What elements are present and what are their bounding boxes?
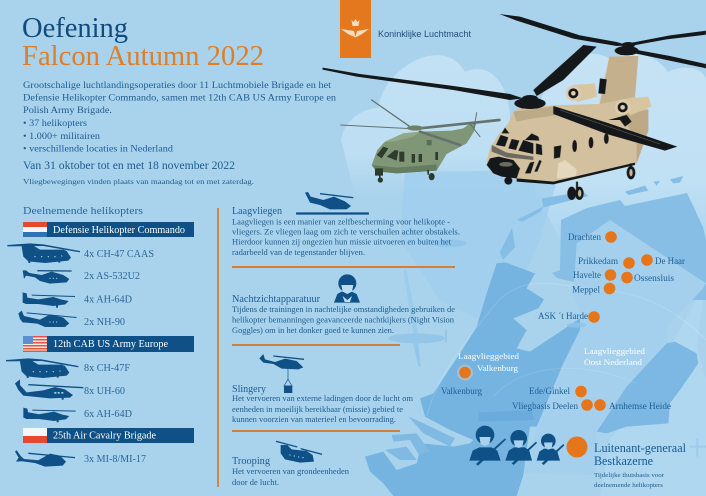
banner: 12th CAB US Army Europe	[23, 336, 194, 352]
icons: Defensie fleet	[7, 243, 80, 327]
icon: helicopter low flight	[296, 192, 369, 215]
faint overlays	[427, 283, 706, 417]
banner: 25th Air Cavalry Brigade: 25th Air Cavalry Brigade	[53, 430, 156, 442]
label: Laagvlieggebied Valkenburg	[458, 351, 520, 373]
section: Trooping: Het vervoeren van grondeenheden	[232, 467, 350, 476]
panel: participating helicopters: 8x UH-60	[84, 386, 125, 397]
icon: Chinook troop transport	[276, 441, 322, 463]
icon: MI-8	[15, 450, 75, 467]
label: Laagvlieggebied Oost Nederland	[584, 346, 646, 367]
heading: Deelnemende helikopters	[23, 206, 143, 217]
banner: 25th Air Cavalry Brigade	[23, 428, 194, 443]
engines	[566, 78, 652, 127]
islands of Zeeland	[408, 417, 455, 447]
map locations	[441, 231, 686, 489]
callout: Luitenant-generaal Bestkazerne: Bestkazerne	[594, 454, 653, 468]
intro text: Defensie Helikopter Commando, samen met 12th CAB US Army Europe en	[23, 92, 336, 104]
map of the Netherlands	[365, 170, 706, 496]
logo block	[340, 0, 371, 58]
label: Laagvlieggebied Valkenburg: Laagvlieggebied	[458, 351, 520, 361]
section: Slingery	[232, 354, 414, 424]
northern provinces	[552, 193, 706, 300]
section: Nachtzichtapparatuur	[232, 274, 455, 335]
intro text: Grootschalige luchtlandingsoperaties door 11 Luchtmobiele Brigade en het	[23, 80, 331, 91]
section: Slingery: Slingery	[232, 384, 267, 395]
location labels: Drachten	[568, 232, 601, 242]
column rule	[217, 208, 219, 487]
title	[22, 12, 264, 72]
fuselage	[487, 56, 648, 183]
date: Van 31 oktober tot en met 18 november 2022	[23, 160, 235, 172]
location labels: Meppel	[572, 284, 601, 294]
intro text: • 1.000+ militairen	[23, 131, 100, 142]
panel: participating helicopters: 6x AH-64D	[84, 409, 132, 420]
banner: Defensie Helikopter Commando	[23, 222, 194, 237]
location labels	[441, 232, 685, 411]
section: Nachtzichtapparatuur: Tijdens de trainingen in nachtelijke omstandigheden gebruiken de	[232, 305, 455, 314]
front rotor	[323, 45, 677, 151]
logo wordmark: Koninklijke Luchtmacht	[378, 29, 471, 40]
title: Falcon Autumn 2022	[22, 40, 264, 72]
label: Laagvlieggebied Oost Nederland: Oost Nederland	[584, 357, 643, 367]
callout: Luitenant-generaal Bestkazerne: Luitenant-generaal	[594, 441, 686, 455]
section: Slingery: eenheden in moeilijk bereikbaar (missie) gebied te	[232, 405, 403, 414]
section: Trooping: Trooping	[232, 456, 271, 467]
northern islands	[517, 176, 683, 222]
clouds	[341, 54, 706, 240]
belly line	[517, 163, 635, 184]
location labels: De Haar	[655, 256, 685, 266]
row labels: US fleet: 8x CH-47F	[84, 363, 130, 374]
banner: 12th CAB US Army Europe: 12th CAB US Army Europe	[53, 339, 168, 350]
section: Nachtzichtapparatuur: Nachtzichtapparatuur	[232, 294, 320, 305]
banner: Defensie Helikopter Commando: Defensie Helikopter Commando	[53, 225, 185, 236]
intro text: Polish Army Brigade.	[23, 105, 112, 116]
landing gear	[504, 163, 635, 200]
section: Trooping: door de lucht.	[232, 478, 279, 487]
logo emblem	[341, 19, 369, 38]
nose band	[492, 145, 533, 160]
section: Trooping	[232, 441, 350, 487]
location labels: Prikkedam	[578, 256, 618, 266]
title: Oefening	[22, 12, 128, 44]
label: Laagvlieggebied Oost Nederland: Laagvlieggebied	[584, 346, 646, 356]
location labels: Vliegbasis Deelen	[512, 401, 578, 411]
illustration: NH-90 helicopter	[341, 100, 499, 183]
row labels: Defensie fleet: 4x CH-47 CAAS	[84, 249, 154, 260]
location labels: Ossensluis	[634, 273, 675, 283]
section: Laagvliegen	[232, 192, 460, 257]
icons: US fleet	[6, 358, 83, 422]
callout: Luitenant-generaal Bestkazerne	[594, 441, 686, 489]
section: Slingery: kunnen voorzien van materieel en bevoorrading.	[232, 415, 396, 424]
location labels: ASK ´t Harde	[538, 311, 588, 321]
icons: soldiers	[469, 426, 564, 466]
panel: participating helicopters: 4x AH-64D	[84, 294, 132, 306]
section: Laagvliegen: radarbeeld van de tegenstander blijven.	[232, 248, 365, 257]
icon: helicopter with sling load	[259, 354, 304, 393]
panel: participating helicopters: 2x NH-90	[84, 317, 125, 328]
schedule note: Vliegbewegingen vinden plaats van maandag tot en met zaterdag.	[23, 177, 254, 186]
illustration: CH-47 Chinook helicopter	[323, 14, 706, 200]
section: Laagvliegen: Laagvliegen is een manier van zelfbescherming voor helikopte -	[232, 218, 450, 226]
location labels: Ede/Ginkel	[529, 386, 570, 396]
row label: MI-8: 3x MI-8/MI-17	[84, 454, 146, 465]
logo: Koninklijke Luchtmacht	[340, 0, 471, 58]
label: Laagvlieggebied Valkenburg: Valkenburg	[477, 363, 519, 373]
callout: Luitenant-generaal Bestkazerne: deelnemende helikopters	[594, 482, 664, 489]
German hinterland	[600, 283, 706, 496]
icon: pilot with night vision goggles	[334, 274, 360, 303]
section: Laagvliegen: vliegers. Ze vliegen laag om zich te verschuilen achter obstakels.	[232, 228, 460, 236]
sea surface	[400, 170, 560, 330]
location dots	[457, 231, 653, 458]
eastern land	[365, 220, 706, 496]
callout: Luitenant-generaal Bestkazerne: Tijdelijke thuisbasis voor	[594, 472, 665, 479]
section: Nachtzichtapparatuur: helikopter bemanningen geavanceerde nachtkijkers (Night Vision	[232, 316, 455, 324]
location labels: Havelte	[573, 270, 601, 280]
windows	[496, 128, 609, 173]
intro text: • verschillende locaties in Nederland	[23, 144, 173, 154]
panel: participating helicopters	[6, 206, 194, 467]
panel: flight techniques	[217, 192, 460, 487]
location labels: Arnhemse Heide	[609, 401, 671, 411]
intro text: • 37 helikopters	[23, 118, 87, 129]
western provinces	[365, 262, 580, 496]
lower east water	[597, 342, 698, 433]
section: Slingery: Het vervoeren van externe ladingen door de lucht om	[232, 394, 414, 403]
panel: participating helicopters: 2x AS-532U2	[84, 271, 140, 282]
section: Nachtzichtapparatuur: Goggles) om in het donker goed te kunnen zien.	[232, 326, 394, 335]
intro text	[23, 80, 336, 154]
location labels: Valkenburg	[441, 386, 482, 396]
section: Laagvliegen: Hierdoor kunnen zij ongezien hun missie uitvoeren en buiten het	[232, 238, 452, 246]
section: Laagvliegen: Laagvliegen	[232, 206, 283, 217]
rear rotor	[499, 14, 706, 68]
